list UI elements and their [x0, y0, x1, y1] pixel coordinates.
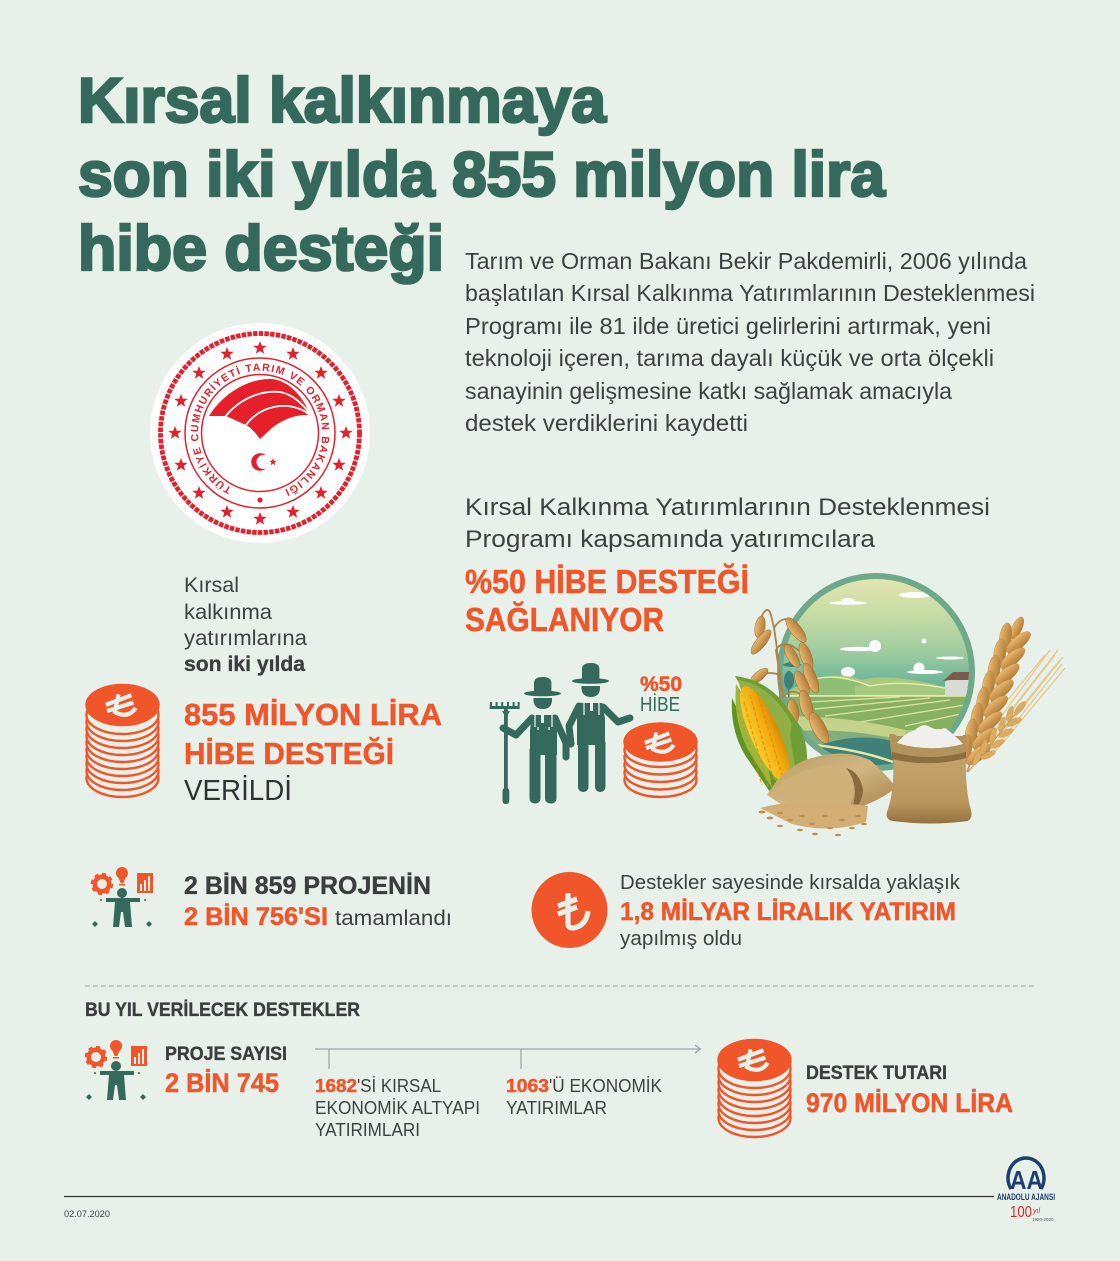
headline: 855 million lira	[184, 697, 442, 807]
illustration: open sack with grain	[758, 753, 896, 836]
text: investments in the last two years: son iki yılda	[184, 653, 305, 676]
arrow: project breakdown	[315, 1045, 700, 1069]
headline: 50% grant	[465, 563, 749, 638]
illustration: landscape window	[777, 573, 975, 771]
intro paragraph	[465, 248, 1035, 436]
headline: 50% grant: SAĞLANIYOR	[465, 601, 664, 638]
icon: left farmer	[503, 677, 566, 804]
text: project count: PROJE SAYISI	[165, 1044, 287, 1065]
icon: project person small	[86, 1040, 147, 1100]
date: 02.07.2020	[64, 1209, 110, 1220]
text: program subheading: Programı kapsamında yatırımcılara	[465, 526, 875, 553]
illustration: full flour sack	[887, 725, 972, 824]
headline: 50% grant: %50 HİBE DESTEĞİ	[465, 563, 749, 600]
text: projects completed: 2 BİN 756'SI	[184, 903, 328, 931]
text: support amount: 970 MİLYON LİRA	[806, 1088, 1013, 1118]
text: 1063 economic investments: 1063	[506, 1076, 549, 1096]
text: support amount	[806, 1063, 1013, 1118]
text: projects completed: tamamlandı	[335, 907, 452, 930]
text: project count	[165, 1044, 287, 1098]
logo: Anadolu Ajansi: 100	[1010, 1204, 1032, 1221]
headline: 855 million lira: HİBE DESTEĞİ	[184, 736, 394, 771]
logo: Anadolu Ajansi: ANADOLU AJANSI	[997, 1192, 1055, 1202]
text: 1682 rural infrastructure: 'Sİ KIRSAL	[357, 1076, 441, 1096]
text: 1.8 billion investment: 1,8 MİLYAR LİRALIK YATIRIM	[620, 898, 956, 926]
intro paragraph: destek verdiklerini kaydetti	[465, 410, 748, 436]
label: %50 HIBE: HİBE	[640, 693, 680, 716]
text: support amount: DESTEK TUTARI	[806, 1063, 947, 1084]
label: %50 HIBE	[640, 673, 682, 716]
heading: this year's supports: BU YIL VERİLECEK DESTEKLER	[85, 1000, 360, 1021]
intro paragraph: başlatılan Kırsal Kalkınma Yatırımlarının Desteklenmesi	[465, 280, 1035, 306]
icon: right farmer	[569, 663, 630, 792]
title: hibe desteği	[78, 214, 444, 284]
icon: small coin stack	[624, 724, 696, 797]
illustration: oat stalks	[748, 610, 833, 746]
label: %50 HIBE: %50	[640, 673, 682, 696]
logo: Anadolu Ajansi: AA	[1010, 1165, 1043, 1195]
title	[78, 66, 886, 284]
icon: coin stack bottom	[718, 1040, 790, 1137]
text: program subheading	[465, 494, 990, 553]
headline: 855 million lira: VERİLDİ	[184, 774, 292, 807]
icon: lira circle	[532, 872, 608, 948]
text: investments in the last two years: kalkınma	[184, 601, 272, 624]
title: son iki yılda 855 milyon lira	[78, 140, 886, 210]
intro paragraph: teknoloji içeren, tarıma dayalı küçük ve orta ölçekli	[465, 345, 994, 371]
text: 1063 economic investments: 'Ü EKONOMİK	[549, 1076, 662, 1096]
text: investments in the last two years	[184, 574, 307, 676]
text: 1063 economic investments	[506, 1076, 662, 1118]
text: 1.8 billion investment: Destekler sayesinde kırsalda yaklaşık	[620, 872, 961, 894]
text: 1682 rural infrastructure: EKONOMİK ALTYAPI	[315, 1098, 480, 1118]
text: project count: 2 BİN 745	[165, 1068, 279, 1098]
text: 1682 rural infrastructure: YATIRIMLARI	[315, 1120, 420, 1140]
text: investments in the last two years: yatırımlarına	[184, 627, 307, 650]
logo: ministry emblem: TÜRKİYE CUMHURİYETİ TARIM VE ORMAN BAKANLIĞI	[190, 364, 330, 496]
headline: 855 million lira: 855 MİLYON LİRA	[184, 697, 442, 732]
icon: large coin stack	[86, 685, 158, 797]
text: 1682 rural infrastructure	[315, 1076, 480, 1140]
title: Kırsal kalkınmaya	[78, 66, 607, 136]
logo: Anadolu Ajansi: 1920-2020	[1032, 1217, 1054, 1222]
text: 1063 economic investments: YATIRIMLAR	[506, 1098, 607, 1118]
logo: Anadolu Ajansi: yıl	[1032, 1208, 1040, 1215]
text: 1.8 billion investment	[620, 872, 961, 950]
text: projects completed	[184, 872, 452, 931]
text: investments in the last two years: Kırsal	[184, 574, 239, 597]
illustration: corn cob	[731, 676, 807, 792]
illustration: wheat ears	[958, 615, 1065, 772]
logo: ministry emblem	[150, 323, 370, 543]
icon: project person with gear, bulb and chart	[92, 867, 153, 927]
intro paragraph: Tarım ve Orman Bakanı Bekir Pakdemirli, 2006 yılında	[465, 248, 1027, 274]
text: 1.8 billion investment: yapılmış oldu	[620, 928, 742, 950]
icon: two farmers with rake	[490, 663, 630, 804]
text: program subheading: Kırsal Kalkınma Yatırımlarının Desteklenmesi	[465, 494, 990, 521]
text: 1682 rural infrastructure: 1682	[315, 1076, 357, 1096]
illustration: farm landscape with crops	[731, 570, 1065, 836]
intro paragraph: Programı ile 81 ilde üretici gelirlerini artırmak, yeni	[465, 313, 991, 339]
logo: Anadolu Ajansi	[997, 1158, 1055, 1222]
icon: rake	[490, 702, 520, 804]
text: projects completed: 2 BİN 859 PROJENİN	[184, 872, 431, 900]
intro paragraph: sanayinin gelişmesine katkı sağlamak amacıyla	[465, 378, 952, 404]
